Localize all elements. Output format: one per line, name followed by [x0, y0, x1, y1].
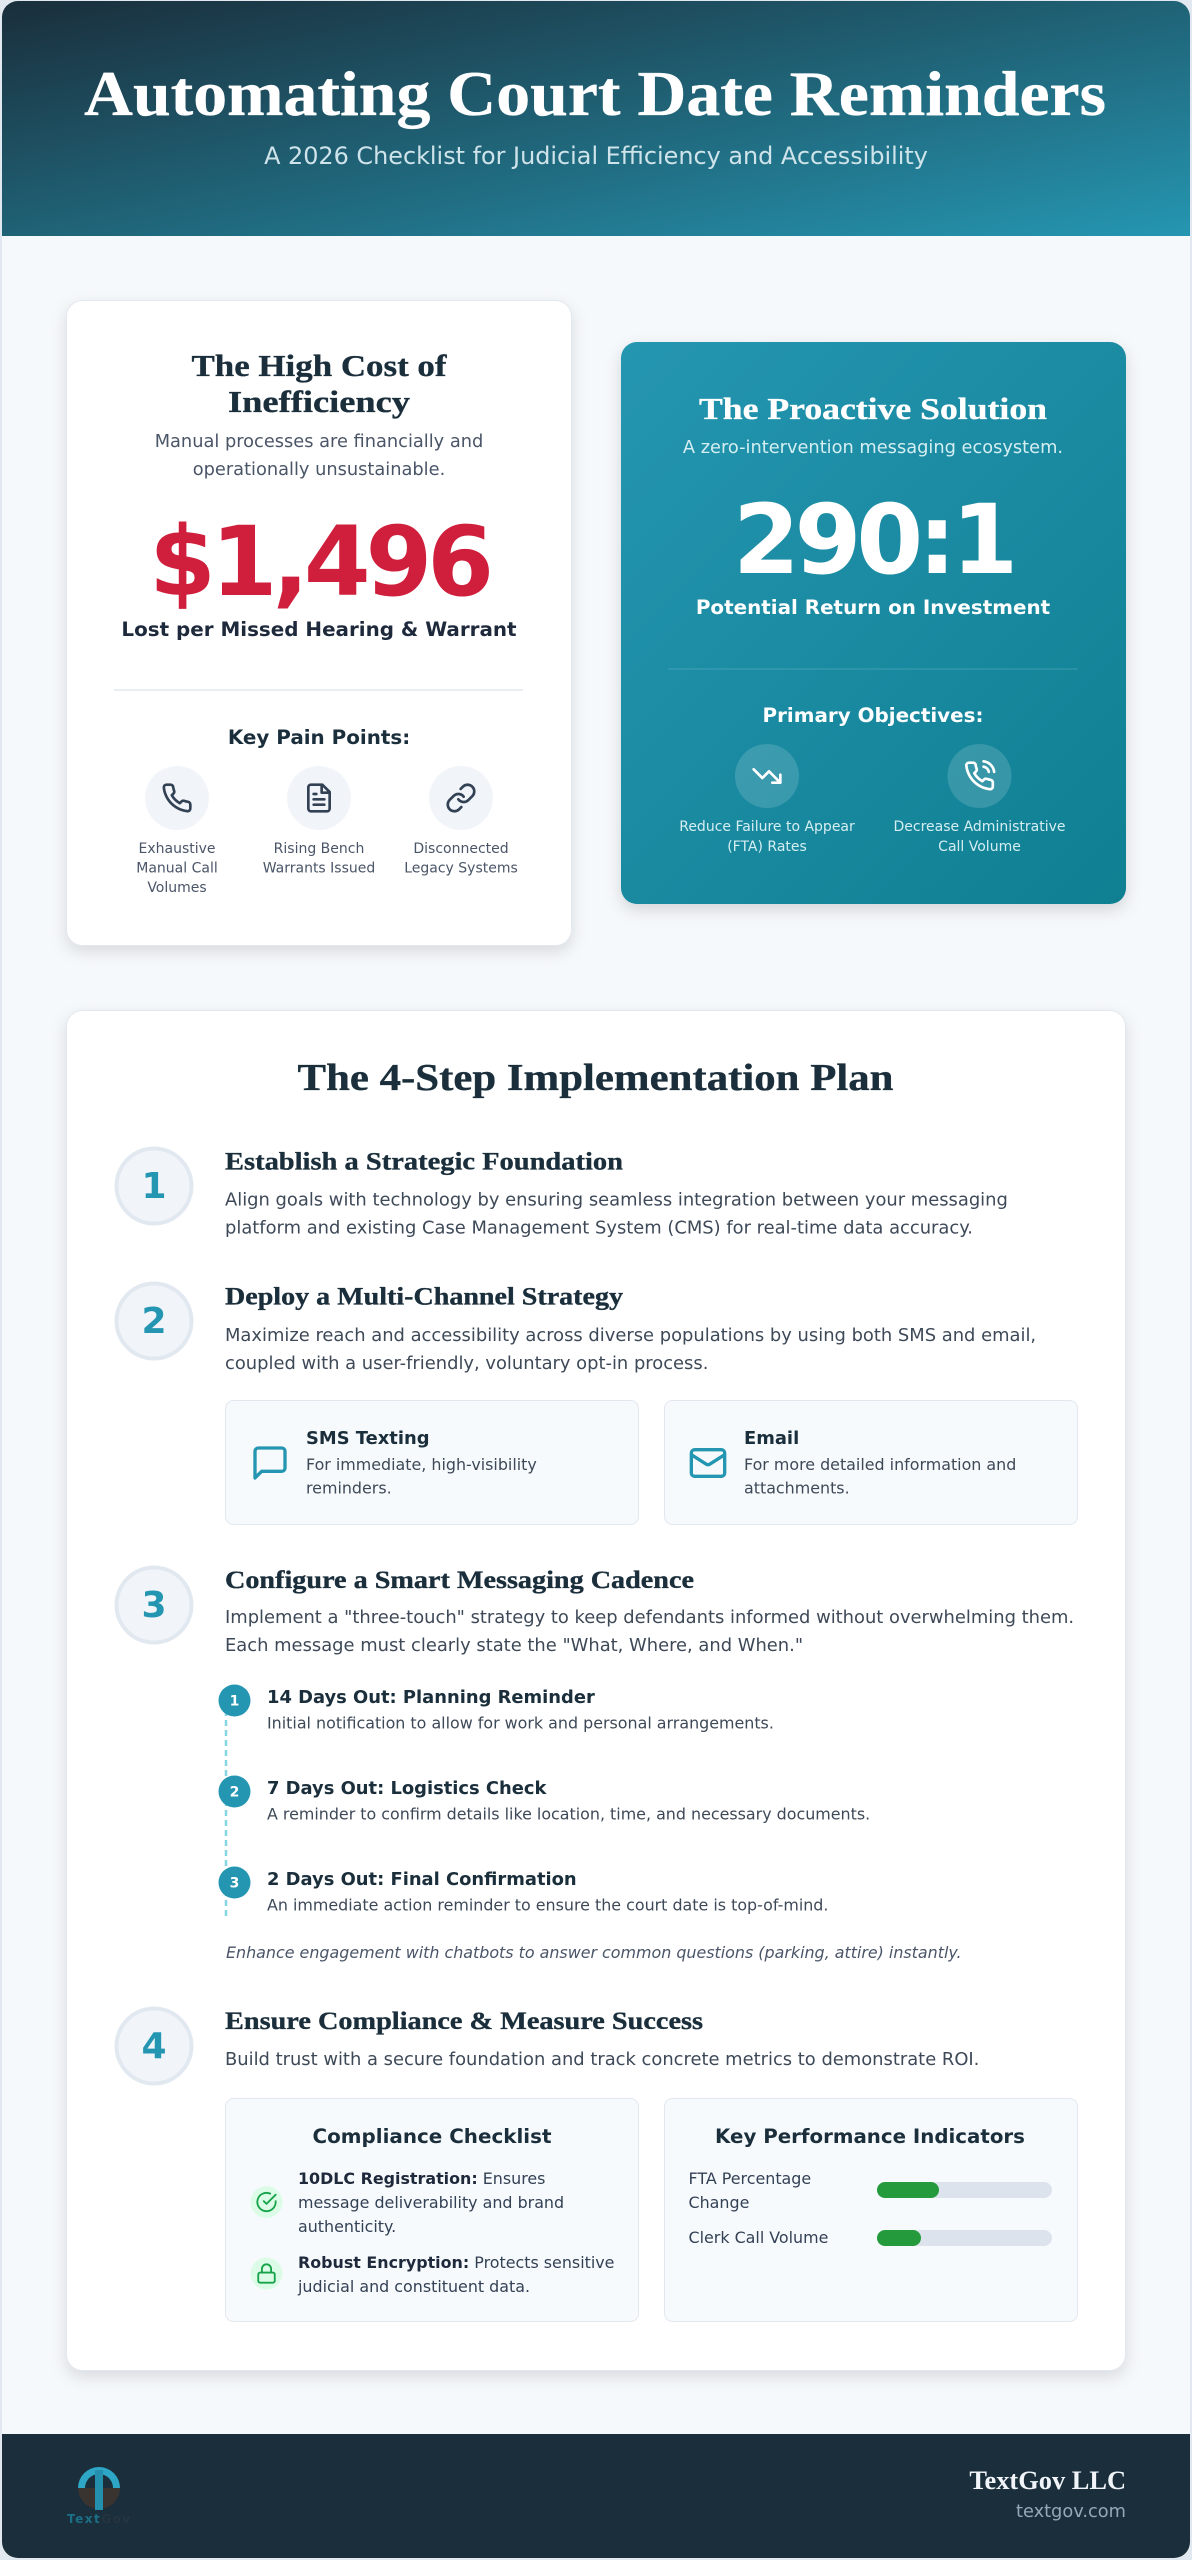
pain point: manual calls: Manual Call [136, 861, 218, 877]
step number 3 [116, 1568, 192, 1642]
panel: high cost of inefficiency [66, 300, 572, 946]
step number 1: 1 [141, 1166, 167, 1207]
header banner [2, 1, 1190, 236]
objective: decrease call volume: Call Volume [938, 839, 1021, 855]
icon: trending down [754, 769, 780, 783]
panel heading: Inefficiency [228, 384, 411, 419]
item: robust encryption: judicial and constituent data. [297, 2277, 530, 2296]
pain point: manual calls [136, 766, 218, 896]
item: 10DLC registration: message deliverability and brand [298, 2193, 564, 2212]
pain point: legacy systems: Legacy Systems [404, 861, 518, 877]
stat caption: Lost per Missed Hearing & Warrant [121, 618, 517, 641]
pain point: manual calls: Exhaustive [138, 841, 216, 857]
touch 1: Initial notification to allow for work and personal arrangements. [267, 1714, 774, 1732]
icon: message bubble [255, 1448, 285, 1478]
icon: phone [164, 785, 190, 811]
step 3 description: Each message must clearly state the "What, Where, and When." [225, 1635, 803, 1656]
pain point: manual calls: Volumes [147, 880, 207, 896]
item: 10DLC registration: 10DLC Registration: [298, 2169, 478, 2188]
card: SMS texting [226, 1400, 638, 1524]
step number 4: 4 [141, 2026, 167, 2067]
touch 3 [218, 1866, 828, 1914]
big stat: cost: $1,496 [149, 506, 489, 618]
step number 2 [116, 1284, 192, 1358]
item: 10DLC registration [250, 2169, 564, 2236]
step 2 heading: Deploy a Multi-Channel Strategy [225, 1284, 624, 1310]
objective: reduce FTA: (FTA) Rates [727, 839, 807, 855]
item: 10DLC registration: Ensures [478, 2169, 545, 2188]
title: Automating Court Date Reminders [84, 58, 1106, 129]
touch 2 [218, 1776, 870, 1824]
plan heading: The 4-Step Implementation Plan [298, 1057, 894, 1099]
icon: lock [258, 2264, 275, 2283]
pain point: legacy systems: Disconnected [413, 841, 509, 857]
card: email [664, 1400, 1078, 1524]
item: 10DLC registration: authenticity. [298, 2217, 396, 2236]
card: SMS texting: SMS Texting [306, 1428, 430, 1449]
KPI: FTA percentage change: Change [688, 2193, 749, 2212]
card: email: Email [744, 1428, 799, 1449]
website: textgov.com [1016, 2501, 1126, 2522]
icon: envelope [691, 1450, 725, 1476]
step 3 description: Implement a "three-touch" strategy to keep defendants informed without overwhelming them. [225, 1607, 1074, 1628]
stat caption: Potential Return on Investment [696, 596, 1051, 619]
icon: document [308, 785, 330, 811]
messaging timeline [218, 1684, 870, 1917]
icon: link [448, 785, 474, 811]
touch 1: 14 Days Out: Planning Reminder [267, 1687, 595, 1708]
panel intro text: A zero-intervention messaging ecosystem. [683, 437, 1063, 458]
touch 2: A reminder to confirm details like location, time, and necessary documents. [267, 1804, 870, 1824]
objective: decrease call volume [894, 744, 1066, 855]
objective: reduce FTA: Reduce Failure to Appear [679, 819, 855, 835]
step 3 heading: Configure a Smart Messaging Cadence [225, 1567, 694, 1594]
step 1 description: platform and existing Case Management System (CMS) for real-time data accuracy. [225, 1218, 973, 1238]
step 2 description: Maximize reach and accessibility across diverse populations by using both SMS and email, [225, 1325, 1036, 1346]
card: compliance checklist: Compliance Checklist [313, 2125, 552, 2148]
step number 1 [116, 1148, 192, 1224]
touch 3: 3 [230, 1876, 239, 1892]
card: SMS texting: reminders. [306, 1478, 392, 1498]
KPI: clerk call volume: Clerk Call Volume [688, 2228, 828, 2247]
chatbot note: Enhance engagement with chatbots to answer common questions (parking, attire) instantly. [226, 1943, 962, 1962]
KPI: clerk call volume [688, 2228, 1052, 2247]
card: key performance indicators [664, 2098, 1078, 2322]
panel heading: The Proactive Solution [699, 391, 1047, 426]
touch 1 [218, 1684, 774, 1732]
card: key performance indicators: Key Performance Indicators [715, 2125, 1025, 2148]
pain point: bench warrants: Warrants Issued [263, 861, 375, 877]
card: email: For more detailed information and [744, 1455, 1016, 1474]
step 4 [116, 2008, 1078, 2322]
step 4 heading: Ensure Compliance & Measure Success [225, 2008, 703, 2035]
touch 1: 1 [230, 1694, 239, 1710]
step 3 [116, 1567, 1074, 1962]
subtitle: A 2026 Checklist for Judicial Efficiency and Accessibility [264, 142, 928, 170]
panel intro text: operationally unsustainable. [193, 459, 445, 480]
step number 4 [116, 2008, 192, 2084]
item: robust encryption [250, 2253, 614, 2296]
big stat: ROI: 290:1 [733, 484, 1013, 596]
icon: phone call [966, 761, 994, 789]
logo: TextGov [67, 2512, 132, 2526]
step 1 heading: Establish a Strategic Foundation [225, 1148, 623, 1176]
panel: implementation plan [66, 1010, 1126, 2370]
touch 2: 7 Days Out: Logistics Check [267, 1778, 548, 1799]
step number 3: 3 [141, 1585, 167, 1626]
card: SMS texting: For immediate, high-visibility [306, 1455, 537, 1474]
step number 2: 2 [141, 1301, 167, 1342]
touch 3: An immediate action reminder to ensure the court date is top-of-mind. [267, 1896, 828, 1914]
footer [2, 2434, 1190, 2558]
objective: decrease call volume: Decrease Administrative [894, 819, 1066, 835]
panel intro text: Manual processes are financially and [155, 431, 483, 452]
step 2 [116, 1284, 1078, 1524]
logo [67, 2467, 132, 2526]
KPI: FTA percentage change: FTA Percentage [688, 2169, 811, 2188]
pain point: bench warrants: Rising Bench [274, 841, 364, 857]
step 1 [116, 1148, 1008, 1238]
objective: reduce FTA [679, 744, 855, 855]
item: robust encryption: Robust Encryption: [298, 2253, 469, 2272]
item: robust encryption: Protects sensitive [469, 2253, 614, 2272]
panel heading: The High Cost of [192, 348, 447, 383]
step 4 description: Build trust with a secure foundation and track concrete metrics to demonstrate ROI. [225, 2049, 979, 2070]
touch 3: 2 Days Out: Final Confirmation [267, 1869, 577, 1890]
step 1 description: Align goals with technology by ensuring seamless integration between your messaging [225, 1190, 1008, 1210]
panel: proactive solution [621, 342, 1126, 904]
icon: check [257, 2193, 276, 2211]
pain point: legacy systems [404, 766, 518, 877]
card: email: attachments. [744, 1478, 850, 1498]
KPI: FTA percentage change [688, 2169, 1052, 2212]
company name: TextGov LLC [969, 2465, 1126, 2495]
step 2 description: coupled with a user-friendly, voluntary opt-in process. [225, 1353, 708, 1374]
card: compliance checklist [226, 2098, 638, 2322]
pain points heading: Key Pain Points: [228, 726, 410, 749]
objectives heading: Primary Objectives: [763, 704, 983, 727]
pain point: bench warrants [263, 766, 375, 877]
panel heading [192, 348, 447, 419]
touch 2: 2 [230, 1784, 239, 1800]
